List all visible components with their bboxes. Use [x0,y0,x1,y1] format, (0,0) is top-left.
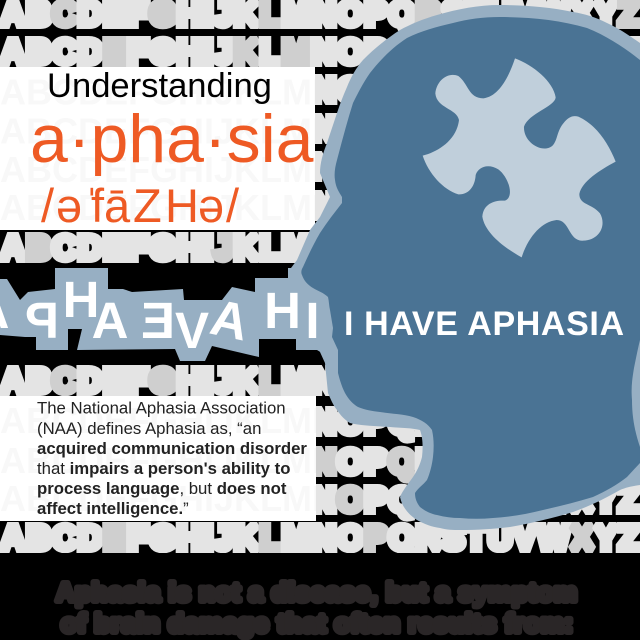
banner letters: scrambled APHASIA: A [92,292,128,349]
banner letters: scrambled APHASIA: H [63,271,99,328]
panel: title block: ABCDEFGHIJKLMN [0,187,338,228]
footer statement: Aphasia is not a disease, but a symptom [56,577,577,607]
heading: aphasia: a·pha·sia [30,101,314,177]
footer statement: of brain damage that often results from: [61,608,573,638]
definition paragraph: (NAA) defines Aphasia as, “an [37,419,261,438]
definition paragraph: , but does not [179,479,286,498]
alphabet letter rows background: ABCDEFGHIJKLMNOPQRSTUVWXYZ [1,481,640,518]
panel: definition text: ABCDEFGHIJKLMN [0,478,338,519]
definition paragraph: impairs a person's ability to [70,459,290,478]
banner letters: scrambled APHASIA: V [175,302,209,359]
alphabet letter rows background: ABCDEFGHIJKLMNOPQRSTUVWXYZ [1,187,640,224]
panel: definition text [0,396,338,521]
panel: title block [0,67,338,232]
panel: title block: ABCDEFGHIJKLMN [0,149,338,190]
alphabet letter rows background: ABCDEFGHIJKLMNOPQRSTUVWXYZ [1,229,640,266]
banner letters: scrambled APHASIA: H [264,282,301,339]
banner letters: scrambled APHASIA: E [141,292,175,349]
head inner fill [301,17,640,519]
footer statement [56,577,577,638]
icon: puzzle piece [423,58,616,257]
definition paragraph: acquired communication disorder [37,439,307,458]
banner letters: scrambled APHASIA: A [206,288,254,352]
banner letters: scrambled APHASIA: I [305,292,320,349]
alphabet letter rows background: ABCDEFGHIJKLMNOPQRSTUVWXYZ [1,148,640,185]
banner letters: scrambled APHASIA [0,271,320,359]
panel: title block: ABCDEFGHIJKLMN [0,72,338,112]
heading: Understanding: Understanding [47,67,272,105]
definition paragraph: The National Aphasia Association [37,398,286,418]
definition paragraph: affect intelligence. [37,499,183,518]
definition paragraph: process language [37,479,179,498]
alphabet letter rows background: ABCDEFGHIJKLMNOPQRSTUVWXYZ [1,33,640,70]
definition paragraph: ” [183,499,189,518]
definition paragraph: that [37,459,70,478]
head outer band [288,5,640,530]
head label: I HAVE APHASIA: I HAVE APHASIA [344,305,624,343]
alphabet letter rows background: ABCDEFGHIJKLMNOPQRSTUVWXYZ [1,110,640,147]
banner letters: scrambled APHASIA: P [25,292,59,349]
panel: title block: ABCDEFGHIJKLMN [0,110,338,152]
banner: scrambled speech ribbon [0,268,330,361]
head silhouette [288,5,640,530]
phonetic spelling: /əˈfāZHə/ [41,179,240,232]
alphabet letter rows background: ABCDEFGHIJKLMNOPQRSTUVWXYZ [1,519,640,556]
panel: definition text: ABCDEFGHIJKLMN [0,400,338,441]
panel: definition text: ABCDEFGHIJKLMN [0,440,338,481]
alphabet letter rows background: ABCDEFGHIJKLMNOPQRSTUVWXYZ [1,443,640,480]
alphabet letter rows background: ABCDEFGHIJKLMNOPQRSTUVWXYZ [1,403,640,440]
alphabet letter rows background: ABCDEFGHIJKLMNOPQRSTUVWXYZ [1,71,640,108]
alphabet letter rows background: ABCDEFGHIJKLMNOPQRSTUVWXYZ [1,362,640,399]
